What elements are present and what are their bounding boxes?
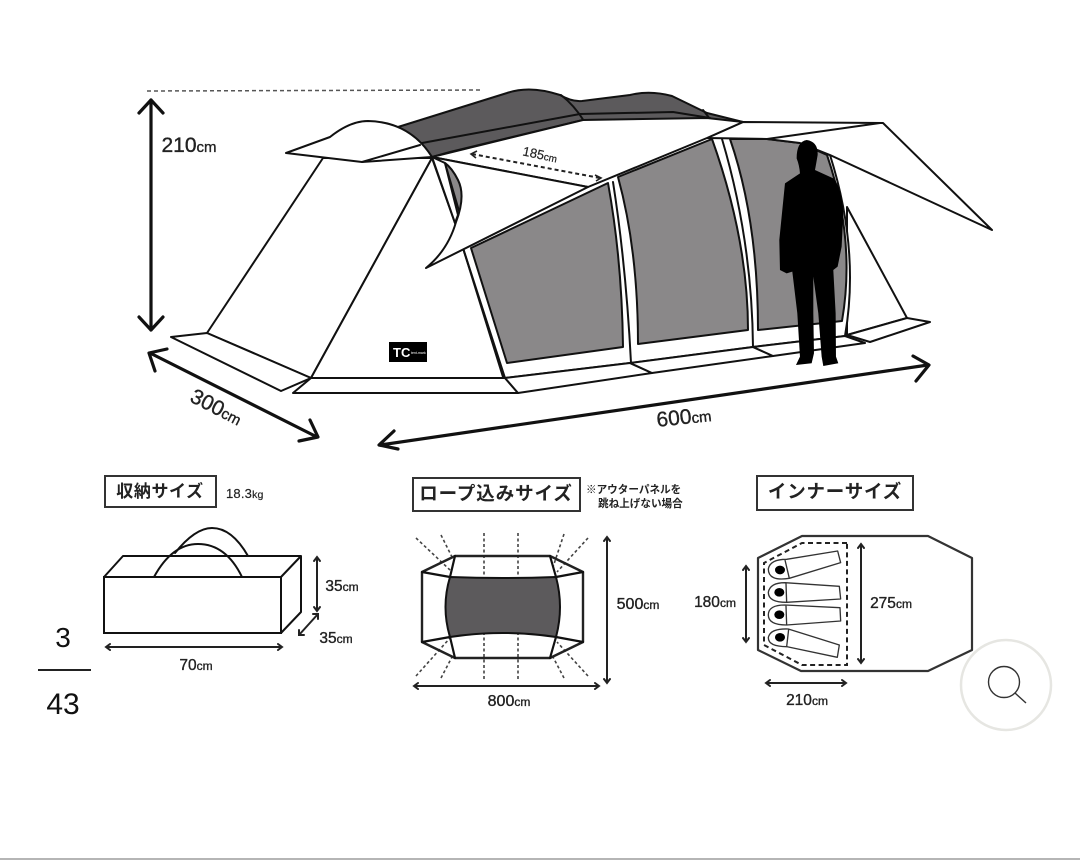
label 800cm: 800cm [488, 693, 530, 710]
label 275cm: 275cm [870, 595, 912, 612]
sleeping bags [768, 551, 841, 657]
width arrow 70cm [106, 644, 282, 650]
front wall [311, 158, 505, 378]
note: ※アウターパネルを [586, 484, 681, 496]
label 70cm: 70cm [179, 657, 213, 674]
window panel 2 [618, 139, 748, 344]
label 210cm: 210cm [786, 692, 828, 709]
width arrow 300cm [149, 349, 318, 441]
heading pitched size [413, 478, 580, 511]
depth measure 185cm [471, 144, 601, 181]
depth arrow 35cm [299, 614, 318, 635]
height arrow 210cm [139, 100, 217, 330]
page counter [38, 622, 91, 721]
main tent illustration [171, 89, 992, 393]
height reference dashed line [147, 90, 480, 91]
left hood awning [286, 121, 432, 162]
heading storage size [105, 476, 216, 507]
window panel 3 [730, 139, 847, 330]
depth measure 185cm: 185cm [521, 144, 559, 165]
panel: pitched size with ropes [413, 478, 683, 710]
inner tent dashed outline [764, 543, 847, 665]
tent footprint [422, 556, 583, 658]
label depth 35cm: 35cm [319, 630, 353, 647]
panel: inner size [694, 476, 972, 709]
left end wall [207, 158, 432, 378]
height arrow 500cm [604, 537, 610, 683]
main side awning flap [426, 118, 743, 268]
dark inner footprint [446, 577, 560, 637]
right awning flap [707, 122, 992, 230]
width arrow 800cm [414, 683, 599, 689]
side wall base [463, 125, 850, 378]
right ground sheet [847, 318, 930, 342]
icon: magnifier button [961, 640, 1051, 730]
weight label: 18.3kg [226, 486, 264, 501]
floor plan outline [758, 536, 972, 671]
height arrow 35cm [314, 557, 320, 611]
right end panel [847, 207, 907, 335]
window panel 1 [471, 183, 623, 363]
label height 35cm: 35cm [325, 578, 359, 595]
arrow 180cm [743, 566, 749, 642]
bottom edge line [0, 858, 1080, 860]
dark roof section [398, 89, 743, 157]
front ground sheet [293, 378, 518, 393]
side ground sheets [505, 363, 652, 393]
note: 跳ね上げない場合 [598, 497, 683, 510]
logo badge: TC [393, 345, 411, 360]
arrow 210cm [766, 680, 846, 686]
label 300cm: 300cm [186, 385, 246, 430]
left ground sheet [171, 333, 311, 391]
logo badge [389, 342, 427, 362]
front door strip [432, 157, 458, 223]
door strip lines [463, 139, 753, 377]
arrow 275cm [858, 544, 864, 663]
label 600cm: 600cm [655, 403, 713, 432]
heading storage size: 収納サイズ [116, 481, 204, 501]
guy ropes [416, 533, 588, 680]
page counter: 43 [46, 688, 80, 721]
heading inner size [757, 476, 913, 510]
page counter: 3 [55, 622, 71, 653]
small grey arc by front wall [445, 163, 463, 211]
logo badge: tent-mark [411, 351, 426, 355]
height label: 210cm [161, 134, 217, 157]
length arrow 600cm [379, 356, 929, 449]
person silhouette [779, 140, 843, 366]
heading inner size: インナーサイズ [768, 481, 902, 502]
panel: storage size [104, 476, 359, 674]
label 180cm: 180cm [694, 594, 736, 611]
label 500cm: 500cm [617, 596, 659, 613]
carry bag drawing [104, 528, 301, 633]
heading pitched size: ロープ込みサイズ [419, 483, 573, 504]
note [586, 484, 683, 510]
